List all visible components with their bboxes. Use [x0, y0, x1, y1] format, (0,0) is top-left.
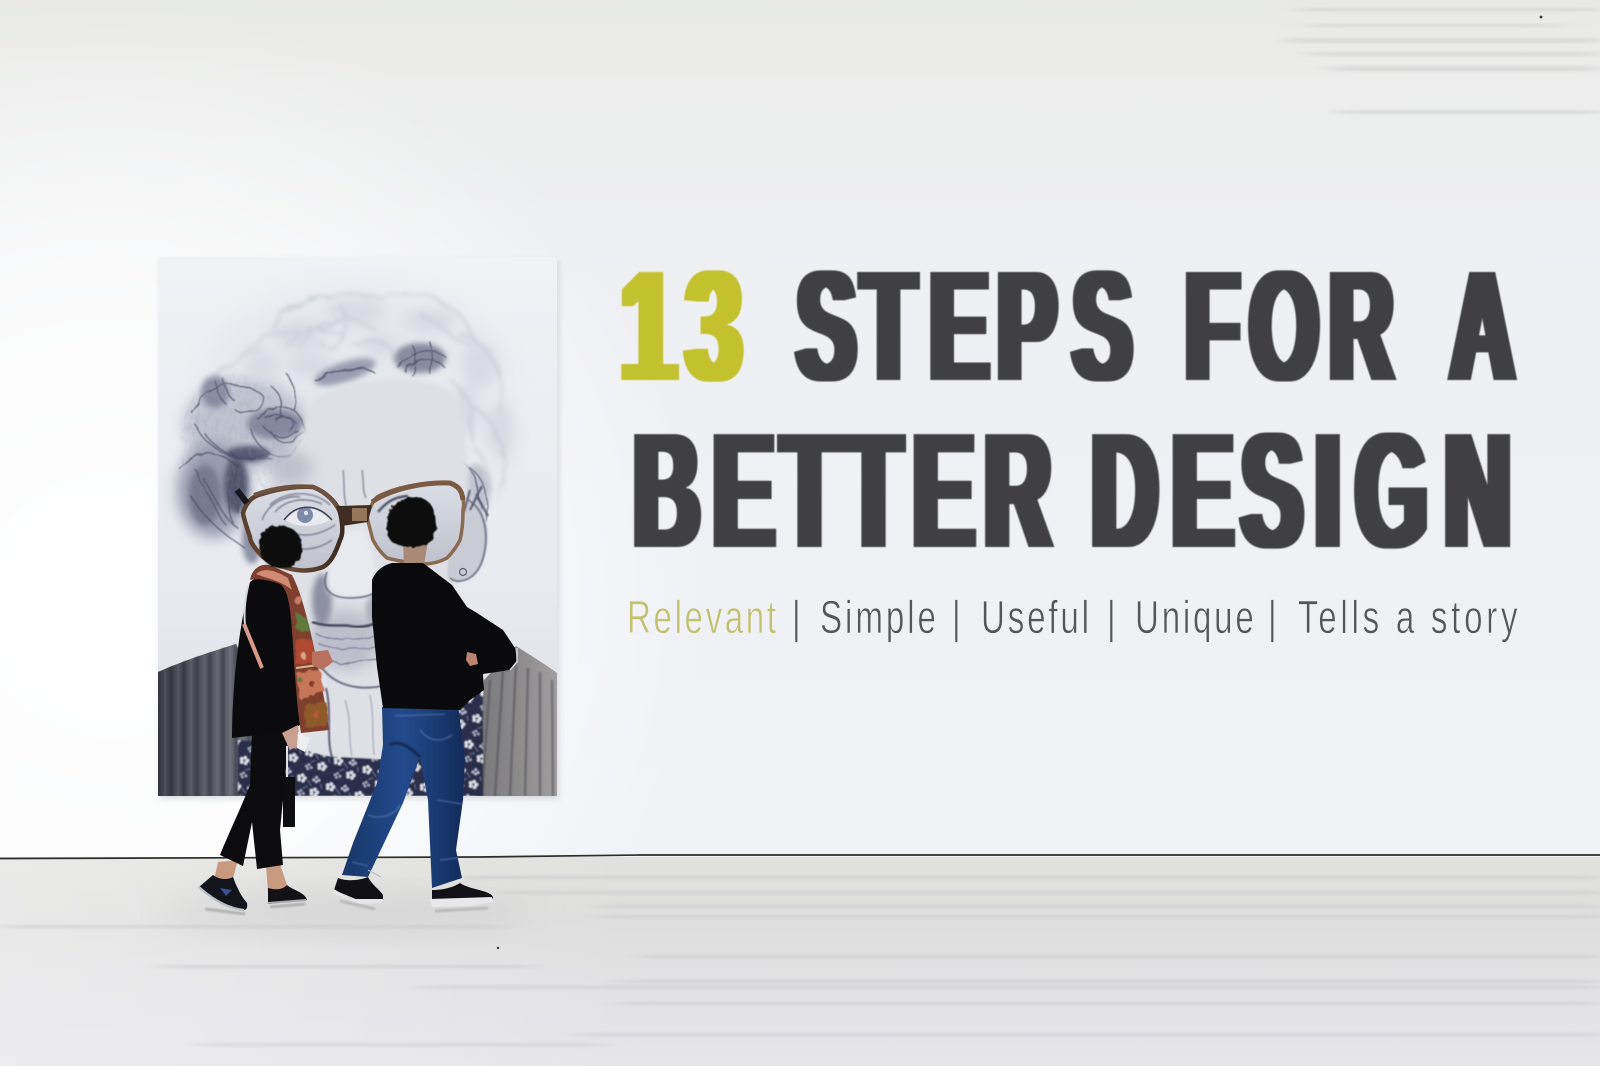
floral blouse — [238, 688, 483, 796]
word: A: A — [1451, 238, 1514, 413]
separator: | — [1268, 593, 1277, 643]
eye — [262, 494, 335, 549]
neck — [325, 670, 400, 760]
man: left sneaker — [334, 870, 383, 904]
man: hand — [466, 652, 478, 666]
word: DESIGN: DESIGN — [1091, 400, 1511, 583]
word: FOR: FOR — [1186, 238, 1393, 413]
hair mass — [170, 288, 520, 564]
woman: left sneaker — [199, 875, 247, 910]
woman: hanging bag — [283, 746, 295, 827]
canvas — [158, 257, 557, 796]
separator: | — [792, 593, 801, 643]
frame — [243, 487, 342, 570]
face shading — [268, 450, 390, 757]
floor — [0, 857, 1600, 1066]
portrait contents — [158, 288, 557, 796]
man: neck — [403, 540, 428, 566]
word: BETTER: BETTER — [634, 400, 1051, 583]
woman: scarf — [250, 565, 329, 733]
tagline: Simple: Simple — [820, 593, 936, 643]
tagline: Relevant: Relevant — [627, 593, 776, 643]
man visitor — [334, 497, 517, 911]
woman visitor — [199, 526, 333, 914]
separator: | — [952, 593, 961, 643]
woman: hand on painting — [312, 650, 333, 670]
face — [272, 383, 472, 618]
glasses — [237, 483, 464, 570]
man: hair — [387, 497, 436, 548]
woman: hand and phone — [282, 725, 310, 752]
woman: hair — [259, 526, 302, 568]
hair grain — [180, 374, 275, 492]
ear — [448, 486, 488, 582]
tagline: Unique: Unique — [1135, 593, 1254, 643]
woman: black coat — [232, 576, 300, 738]
separator: | — [1107, 593, 1116, 643]
tagline: Useful: Useful — [981, 593, 1089, 643]
man: jeans — [342, 705, 465, 888]
woman: shoe shadows — [205, 904, 305, 914]
woman: right sneaker — [268, 885, 307, 904]
right lens — [369, 497, 462, 562]
woman: black trousers — [220, 730, 288, 869]
word: STEPS: STEPS — [797, 238, 1132, 413]
tagline: Tells a story: Tells a story — [1298, 593, 1518, 643]
man: black sweater — [372, 563, 517, 710]
title number 13: 13 — [620, 238, 742, 413]
title — [620, 238, 1514, 583]
cardigan right — [476, 646, 557, 796]
woman: skin ankles — [214, 860, 288, 892]
left lens — [246, 496, 340, 568]
cardigan left — [158, 644, 262, 796]
tagline — [627, 593, 1518, 643]
woman: bag strap — [244, 586, 262, 668]
painting: portrait of elderly woman — [158, 257, 559, 799]
man: shoe shadows — [340, 901, 488, 911]
man: right sneaker — [430, 883, 493, 907]
wall-floor line — [0, 855, 1600, 858]
